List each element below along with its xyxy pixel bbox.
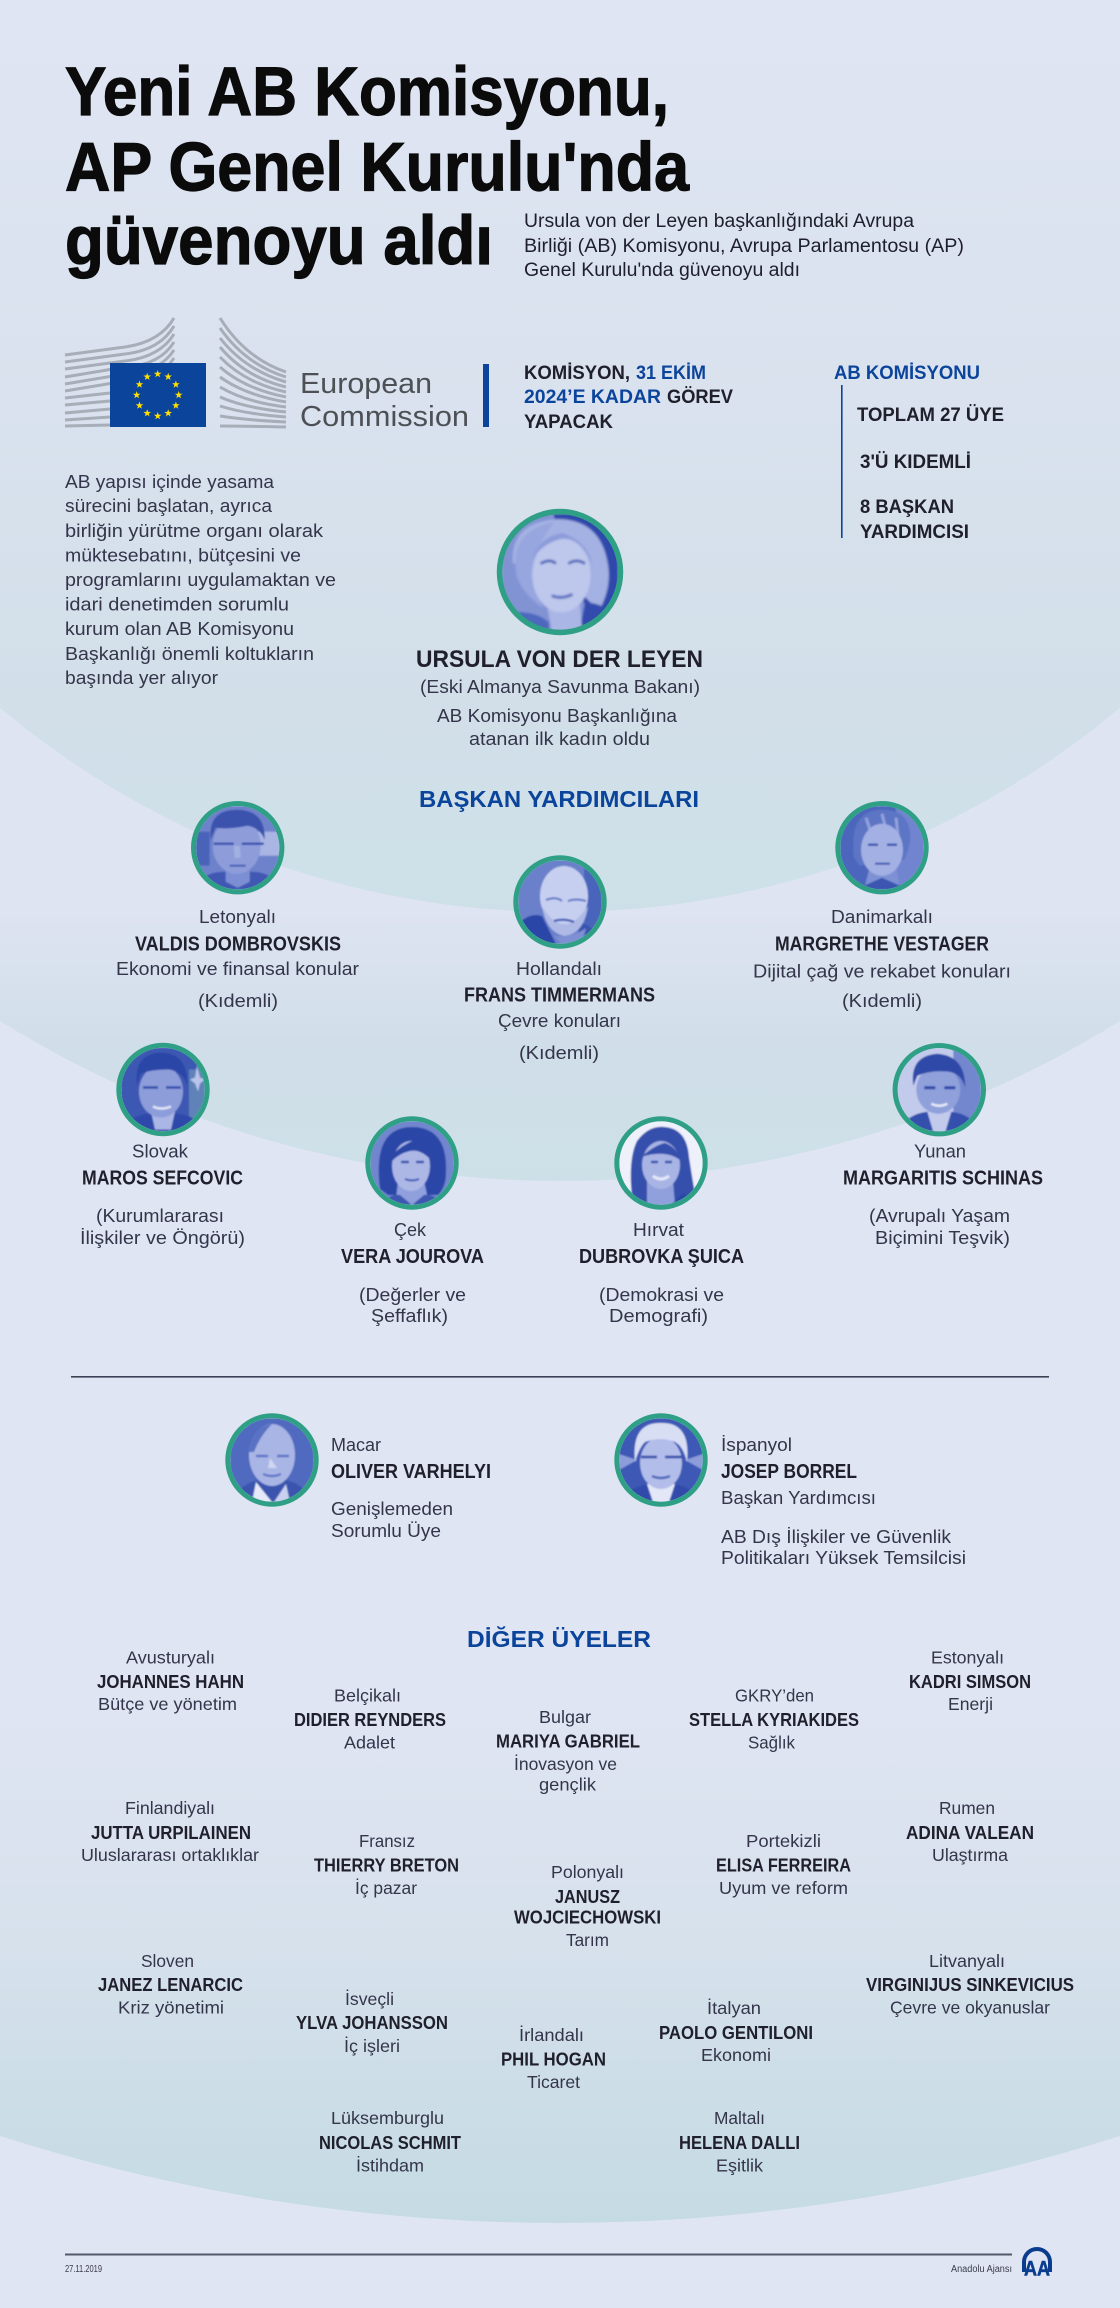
member: Josep Borrel — [617, 1416, 966, 1568]
member: Ylva Johansson: İç işleri — [344, 2036, 400, 2056]
member: Janusz Wojciechowski: Tarım — [566, 1930, 609, 1950]
vice president: Valdis Dombrovskis: Letonyalı — [199, 906, 276, 927]
vice president: Maros Sefcovic: MAROS SEFCOVIC — [82, 1168, 243, 1190]
member: Johannes Hahn: JOHANNES HAHN — [97, 1672, 244, 1692]
intro paragraph: programlarını uygulamaktan ve — [65, 569, 336, 590]
member: Elisa Ferreira: Portekizli — [746, 1831, 821, 1851]
commission stats: 3'Ü KIDEMLİ — [860, 452, 971, 473]
member: Paolo Gentiloni: İtalyan — [707, 1998, 761, 2018]
intro paragraph: kurum olan AB Komisyonu — [65, 618, 294, 639]
member: Helena Dalli — [679, 2108, 800, 2176]
member: Stella Kyriakides — [689, 1686, 859, 1752]
intro paragraph: sürecini başlatan, ayrıca — [65, 495, 273, 516]
member: Phil Hogan: Ticaret — [527, 2072, 580, 2092]
member: Janusz Wojciechowski: WOJCIECHOWSKI — [514, 1908, 661, 1928]
vice president: Dubrovka Suica — [579, 1119, 744, 1326]
member: Didier Reynders: Adalet — [344, 1732, 395, 1752]
other members list — [81, 1648, 1074, 2176]
member: Jutta Urpilainen — [81, 1798, 259, 1865]
icon: AA logo: AA — [1024, 2258, 1050, 2280]
member: Josep Borrel: Başkan Yardımcısı — [721, 1487, 876, 1508]
portrait: Varhelyi — [228, 1416, 316, 1504]
portrait: Ursula von der Leyen — [500, 512, 620, 632]
vice president: Margrethe Vestager: Danimarkalı — [831, 906, 933, 927]
member: Adina Valean: ADINA VALEAN — [906, 1823, 1034, 1843]
member: Kadri Simson — [909, 1648, 1031, 1714]
member: Helena Dalli: Eşitlik — [716, 2156, 763, 2176]
commission stats: 8 BAŞKAN — [860, 497, 954, 518]
logo: European Commission: Commission — [300, 401, 469, 433]
member: Janusz Wojciechowski — [514, 1862, 661, 1950]
member: Helena Dalli: Maltalı — [714, 2108, 765, 2128]
member: Mariya Gabriel: İnovasyon ve — [514, 1754, 617, 1774]
member: Virginijus Sinkevicius: Çevre ve okyanuslar — [890, 1998, 1050, 2018]
subtitle: Ursula von der Leyen başkanlığındaki Avrupa — [524, 211, 914, 232]
vice president: Frans Timmermans: FRANS TIMMERMANS — [464, 984, 655, 1006]
term note: KOMİSYON, — [524, 363, 630, 384]
member: Adina Valean: Rumen — [939, 1798, 995, 1818]
member: Janez Lenarcic: Sloven — [141, 1951, 194, 1971]
vice president: Margaritis Schinas: MARGARITIS SCHINAS — [843, 1168, 1043, 1190]
president: Ursula von der Leyen — [416, 512, 703, 749]
portrait: Suica — [617, 1119, 705, 1207]
member: Mariya Gabriel: Bulgar — [539, 1707, 591, 1727]
vice president: Dubrovka Suica: DUBROVKA ŞUICA — [579, 1246, 744, 1268]
term note: GÖREV — [667, 387, 733, 408]
intro paragraph: başında yer alıyor — [65, 667, 218, 688]
president: Ursula von der Leyen: AB Komisyonu Başkanlığına — [437, 705, 678, 726]
member: Josep Borrel: AB Dış İlişkiler ve Güvenlik — [721, 1526, 952, 1547]
vice president: Valdis Dombrovskis: Ekonomi ve finansal konular — [116, 958, 359, 979]
subtitle — [524, 211, 964, 281]
title: Yeni AB Komisyonu, — [65, 53, 669, 130]
member: Phil Hogan: PHIL HOGAN — [501, 2050, 606, 2070]
member: Johannes Hahn: Avusturyalı — [126, 1648, 215, 1668]
member: Janez Lenarcic: Kriz yönetimi — [118, 1998, 224, 2018]
vice president: Frans Timmermans: Çevre konuları — [498, 1010, 621, 1031]
member: Virginijus Sinkevicius — [866, 1951, 1074, 2018]
member: Ylva Johansson — [296, 1989, 448, 2056]
portrait: Dombrovskis — [194, 804, 282, 892]
term note: 31 EKİM — [636, 363, 706, 384]
member: Didier Reynders — [294, 1686, 446, 1752]
portrait: Timmermans — [516, 858, 604, 946]
member: Paolo Gentiloni: PAOLO GENTILONI — [659, 2023, 813, 2043]
member: Josep Borrel: Politikaları Yüksek Temsilcisi — [721, 1547, 966, 1568]
vice president: Vera Jourova: Çek — [394, 1219, 427, 1240]
title — [65, 53, 690, 279]
vice president: Maros Sefcovic: (Kurumlararası — [96, 1205, 224, 1226]
term note: YAPACAK — [524, 412, 613, 433]
icon: AA logo — [1024, 2249, 1050, 2280]
president: Ursula von der Leyen: atanan ilk kadın oldu — [469, 728, 650, 749]
intro paragraph: idari denetimden sorumlu — [65, 594, 289, 614]
member: Johannes Hahn — [97, 1648, 244, 1714]
president: Ursula von der Leyen: URSULA VON DER LEYEN — [416, 646, 703, 673]
portrait: Borrel — [617, 1416, 705, 1504]
heading: other members: DİĞER ÜYELER — [467, 1625, 651, 1652]
subtitle: Genel Kurulu'nda güvenoyu aldı — [524, 260, 800, 281]
vice president: Dubrovka Suica: Demografi) — [609, 1305, 708, 1326]
vice president: Margrethe Vestager: Dijital çağ ve rekabet konuları — [753, 960, 1011, 982]
vice president: Dubrovka Suica: Hırvat — [633, 1219, 684, 1240]
member: Josep Borrel: İspanyol — [721, 1434, 792, 1455]
member: Adina Valean — [906, 1798, 1034, 1865]
title: güvenoyu aldı — [65, 202, 493, 279]
portrait: Sefcovic — [119, 1045, 207, 1134]
term note: 2024’E KADAR — [524, 387, 661, 408]
member: Janusz Wojciechowski: JANUSZ — [555, 1887, 620, 1907]
member: Oliver Varhelyi: OLIVER VARHELYI — [331, 1461, 491, 1483]
member: Thierry Breton: İç pazar — [355, 1878, 417, 1898]
vice president: Vera Jourova: VERA JOUROVA — [341, 1246, 484, 1268]
member: Oliver Varhelyi — [228, 1416, 491, 1541]
member: Nicolas Schmit — [319, 2108, 461, 2176]
member: Ylva Johansson: YLVA JOHANSSON — [296, 2013, 448, 2033]
portrait: Schinas — [895, 1046, 984, 1134]
member: Elisa Ferreira — [716, 1831, 851, 1898]
vice president: Dubrovka Suica: (Demokrasi ve — [599, 1284, 724, 1305]
term note — [524, 363, 733, 433]
member: Paolo Gentiloni — [659, 1998, 813, 2065]
vice president: Frans Timmermans — [464, 858, 655, 1063]
vice president: Valdis Dombrovskis: (Kıdemli) — [198, 990, 278, 1011]
member: Nicolas Schmit: NICOLAS SCHMIT — [319, 2133, 461, 2153]
member: Kadri Simson: Enerji — [948, 1694, 993, 1714]
member: Phil Hogan: İrlandalı — [519, 2025, 584, 2045]
member: Kadri Simson: Estonyalı — [931, 1648, 1004, 1668]
member: Mariya Gabriel — [496, 1707, 640, 1794]
member: Ylva Johansson: İsveçli — [345, 1989, 394, 2009]
vice president: Vera Jourova: (Değerler ve — [359, 1284, 466, 1305]
member: Stella Kyriakides: Sağlık — [748, 1732, 795, 1752]
commission stats: AB KOMİSYONU — [834, 363, 980, 384]
member: Thierry Breton — [314, 1831, 459, 1898]
portrait: Vestager — [838, 804, 926, 892]
vice president: Margrethe Vestager: MARGRETHE VESTAGER — [775, 934, 989, 956]
member: Nicolas Schmit: İstihdam — [356, 2156, 424, 2176]
member: Jutta Urpilainen: JUTTA URPILAINEN — [91, 1823, 251, 1843]
intro paragraph: AB yapısı içinde yasama — [65, 471, 275, 492]
vice president: Maros Sefcovic: İlişkiler ve Öngörü) — [80, 1227, 245, 1248]
member: Didier Reynders: Belçikalı — [334, 1686, 401, 1706]
member: Josep Borrel: JOSEP BORREL — [721, 1461, 857, 1483]
member: Paolo Gentiloni: Ekonomi — [701, 2045, 771, 2065]
subtitle: Birliği (AB) Komisyonu, Avrupa Parlamentosu (AP) — [524, 236, 964, 257]
member: Thierry Breton: THIERRY BRETON — [314, 1856, 459, 1876]
member: Stella Kyriakides: GKRY’den — [735, 1686, 814, 1706]
footer: Anadolu Ajansı — [951, 2264, 1012, 2275]
logo: European Commission: European — [300, 368, 432, 400]
commission stats — [834, 363, 1004, 543]
vice president: Margaritis Schinas: (Avrupalı Yaşam — [869, 1205, 1010, 1226]
member: Oliver Varhelyi: Sorumlu Üye — [331, 1520, 441, 1541]
member: Janez Lenarcic: JANEZ LENARCIC — [98, 1975, 243, 1995]
member: Kadri Simson: KADRI SIMSON — [909, 1672, 1031, 1692]
vice president: Margaritis Schinas: Biçimini Teşvik) — [875, 1227, 1010, 1248]
vice president: Vera Jourova — [341, 1119, 484, 1326]
member: Didier Reynders: DIDIER REYNDERS — [294, 1710, 446, 1730]
member: Elisa Ferreira: ELISA FERREIRA — [716, 1856, 851, 1876]
member: Mariya Gabriel: MARIYA GABRIEL — [496, 1732, 640, 1752]
member: Virginijus Sinkevicius: Litvanyalı — [929, 1951, 1005, 1971]
vice president: Valdis Dombrovskis — [116, 804, 359, 1011]
member: Phil Hogan — [501, 2025, 606, 2092]
footer: 27.11.2019 — [65, 2264, 102, 2275]
intro paragraph: müktesebatını, bütçesini ve — [65, 544, 301, 566]
president: Ursula von der Leyen: (Eski Almanya Savunma Bakanı) — [420, 676, 700, 697]
commission stats: TOPLAM 27 ÜYE — [857, 405, 1004, 426]
member: Nicolas Schmit: Lüksemburglu — [331, 2108, 444, 2128]
vice president: Frans Timmermans: Hollandalı — [516, 958, 602, 979]
vice president: Maros Sefcovic — [80, 1045, 245, 1248]
member: Adina Valean: Ulaştırma — [932, 1845, 1008, 1865]
commission stats: YARDIMCISI — [860, 522, 969, 543]
member: Elisa Ferreira: Uyum ve reform — [719, 1878, 848, 1898]
member: Thierry Breton: Fransız — [359, 1831, 415, 1851]
intro paragraph: Başkanlığı önemli koltukların — [65, 643, 314, 664]
vice president: Margaritis Schinas — [843, 1046, 1043, 1248]
intro paragraph: birliğin yürütme organı olarak — [65, 520, 324, 541]
vice president: Margrethe Vestager: (Kıdemli) — [842, 990, 922, 1011]
member: Virginijus Sinkevicius: VIRGINIJUS SINKEVICIUS — [866, 1975, 1074, 1995]
member: Jutta Urpilainen: Finlandiyalı — [125, 1798, 215, 1818]
title: AP Genel Kurulu'nda — [65, 128, 690, 206]
member: Janez Lenarcic — [98, 1951, 243, 2018]
vice president: Frans Timmermans: (Kıdemli) — [519, 1042, 599, 1063]
member: Stella Kyriakides: STELLA KYRIAKIDES — [689, 1710, 859, 1730]
vice president: Maros Sefcovic: Slovak — [132, 1140, 189, 1162]
heading: vice presidents: BAŞKAN YARDIMCILARI — [419, 786, 699, 812]
member: Jutta Urpilainen: Uluslararası ortaklıklar — [81, 1845, 259, 1865]
logo: European Commission — [65, 318, 489, 433]
vice president: Margrethe Vestager — [753, 804, 1011, 1011]
portrait: Jourova — [368, 1119, 456, 1207]
member: Janusz Wojciechowski: Polonyalı — [551, 1862, 624, 1882]
vice president: Vera Jourova: Şeffaflık) — [371, 1305, 448, 1326]
vice president: Margaritis Schinas: Yunan — [914, 1140, 966, 1162]
member: Johannes Hahn: Bütçe ve yönetim — [98, 1694, 237, 1714]
member: Oliver Varhelyi: Genişlemeden — [331, 1498, 453, 1519]
member: Oliver Varhelyi: Macar — [331, 1434, 381, 1455]
member: Helena Dalli: HELENA DALLI — [679, 2133, 800, 2153]
vice president: Valdis Dombrovskis: VALDIS DOMBROVSKIS — [135, 934, 341, 956]
member: Mariya Gabriel: gençlik — [539, 1774, 596, 1794]
intro paragraph — [65, 471, 336, 688]
footer — [65, 2249, 1050, 2280]
